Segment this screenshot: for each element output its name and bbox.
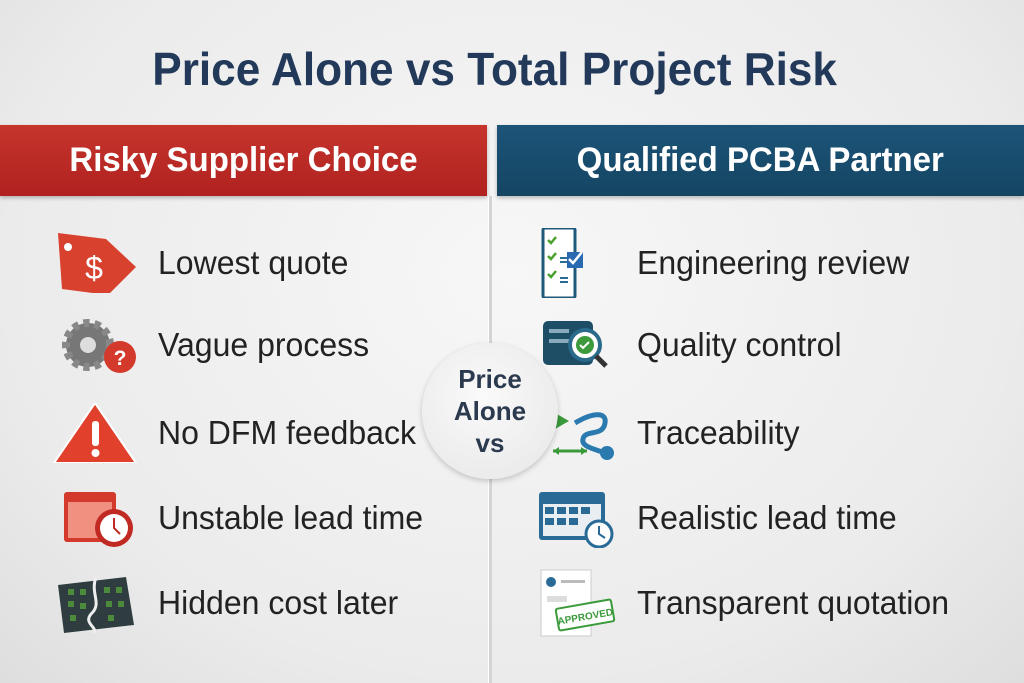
item: vague process: ?: [114, 347, 126, 370]
item: quality control: Quality control: [637, 326, 842, 363]
item: quality control: [543, 321, 842, 368]
item: lowest quote: $: [85, 250, 103, 286]
item: transparent quotation: [540, 570, 949, 636]
item: traceability: [553, 412, 800, 460]
center badge: Alone: [454, 396, 526, 426]
item: vague process: [62, 319, 369, 373]
banner: risky supplier: [0, 125, 487, 196]
item: hidden cost: [58, 577, 398, 633]
item: unstable lead time: Unstable lead time: [158, 499, 423, 536]
center badge: vs: [476, 428, 504, 458]
item: no dfm: No DFM feedback: [158, 414, 416, 451]
panel: qualified list: [539, 228, 949, 636]
item: lowest quote: Lowest quote: [158, 244, 348, 281]
item: realistic lead time: [539, 492, 897, 548]
title: Price Alone vs Total Project Risk: [153, 43, 837, 95]
item: unstable lead time: [64, 492, 423, 547]
item: transparent quotation: APPROVED: [557, 607, 614, 628]
panel: risky list: [53, 233, 423, 633]
item: engineering review: [542, 228, 910, 298]
item: realistic lead time: Realistic lead time: [637, 499, 897, 536]
item: hidden cost: Hidden cost later: [158, 584, 398, 621]
item: lowest quote: [58, 233, 348, 293]
center badge: Price: [458, 364, 522, 394]
item: transparent quotation: Transparent quotation: [637, 584, 949, 621]
item: traceability: Traceability: [637, 414, 799, 451]
item: engineering review: Engineering review: [637, 244, 909, 281]
banner: qualified partner: Qualified PCBA Partner: [577, 141, 944, 179]
banner: qualified partner: [497, 125, 1024, 196]
item: no dfm: [53, 403, 416, 463]
center badge: [422, 343, 558, 479]
banner: risky supplier: Risky Supplier Choice: [69, 141, 418, 179]
item: vague process: Vague process: [158, 326, 369, 363]
